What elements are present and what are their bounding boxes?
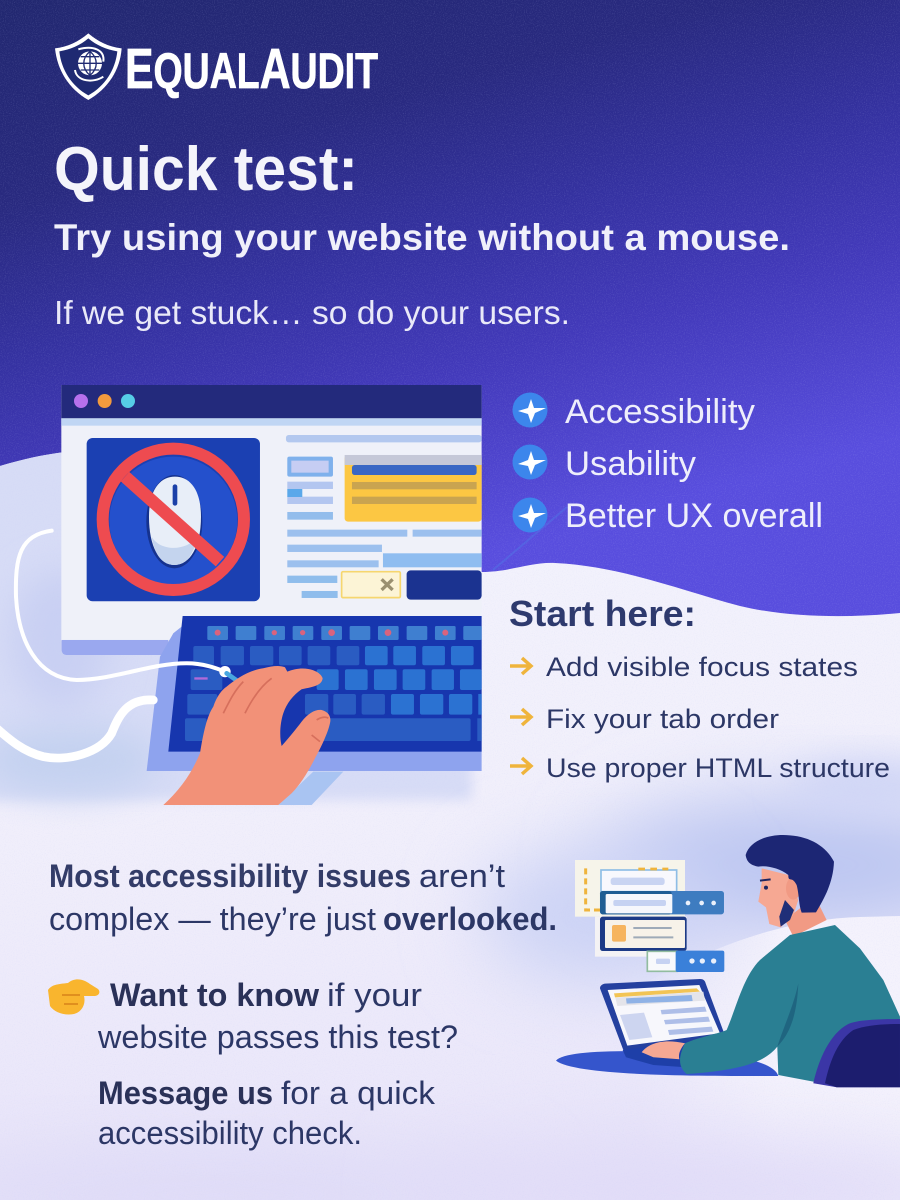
keyboard tray — [147, 627, 482, 771]
browser content bars — [286, 435, 482, 598]
table — [556, 1051, 778, 1076]
faint diagonal line — [493, 507, 567, 570]
man: hair — [746, 835, 834, 913]
bullet: Usability: Usability — [565, 445, 696, 483]
item: HTML structure: Use proper HTML structure — [546, 753, 890, 783]
tagline: If we get stuck… so do your users. — [54, 294, 570, 331]
background: light wave area — [0, 400, 900, 1200]
panel: no mouse icon — [87, 438, 260, 601]
browser shadow — [62, 637, 168, 655]
statement text: Most accessibility issues — [49, 858, 411, 894]
bullet: Better UX overall: Better UX overall — [565, 497, 823, 535]
call to action text: Message us — [98, 1075, 273, 1111]
man: hand — [642, 1041, 685, 1059]
man: shirt and arm — [680, 925, 900, 1087]
input with close icon — [342, 572, 400, 598]
icon: pointing hand — [48, 979, 99, 1015]
subtitle: Try using your website without a mouse. — [54, 217, 790, 258]
chair back — [813, 1019, 900, 1087]
statement text: aren’t — [419, 858, 505, 894]
item: tab order: Fix your tab order — [546, 704, 779, 734]
call to action text: if your — [327, 977, 422, 1013]
statement text: complex — they’re just — [49, 901, 376, 937]
call to action text: Want to know — [110, 977, 319, 1013]
logo wordmark: EQUALAUDIT — [125, 37, 378, 101]
bullet list — [512, 392, 823, 535]
yellow card — [345, 455, 482, 522]
statement text: overlooked. — [383, 901, 557, 937]
call to action text — [97, 977, 458, 1151]
icon: shield with globe — [55, 33, 122, 100]
bullet: Accessibility: Accessibility — [565, 393, 755, 431]
checklist — [510, 652, 890, 783]
statement text — [49, 858, 557, 937]
man: neck and face — [758, 868, 827, 937]
illustration: man at laptop — [556, 835, 900, 1087]
desk strip under the tray — [278, 772, 343, 805]
call to action text: website passes this test? — [97, 1019, 458, 1055]
keyboard — [168, 616, 482, 752]
item: focus states: Add visible focus states — [546, 652, 858, 682]
illustration: browser and keyboard — [0, 385, 482, 805]
heading: Start here: Start here: — [509, 593, 696, 634]
title: Quick test: Quick test: — [54, 135, 358, 204]
browser window — [61, 385, 482, 640]
logo: EqualAudit — [55, 33, 378, 101]
floating UI cards — [575, 860, 724, 972]
call to action text: for a quick — [281, 1075, 436, 1111]
dark button — [407, 570, 482, 600]
call to action text: accessibility check. — [98, 1115, 362, 1151]
laptop — [600, 979, 727, 1068]
bullet: Usability — [512, 444, 696, 483]
hand — [163, 666, 330, 805]
cables — [0, 531, 238, 758]
